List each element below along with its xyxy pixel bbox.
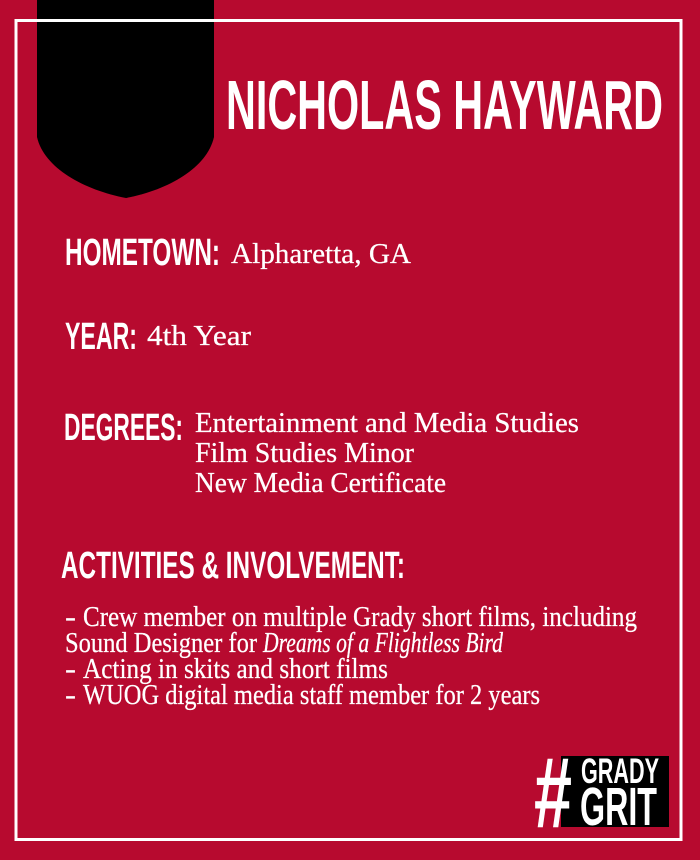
- activities list: Acting in skits and short films: [83, 654, 388, 685]
- activities list: Dreams of a Flightless Bird: [262, 628, 504, 659]
- activities heading: ACTIVITIES & INVOLVEMENT:: [61, 545, 405, 587]
- degrees list: Entertainment and Media Studies: [195, 408, 579, 439]
- activities list: -: [65, 602, 76, 633]
- hometown row: [65, 232, 412, 274]
- year label: YEAR:: [65, 316, 137, 358]
- activities list: Sound Designer for: [65, 628, 258, 659]
- hometown label: HOMETOWN:: [65, 232, 220, 274]
- degrees row: [64, 407, 579, 499]
- year row: [65, 316, 252, 358]
- logo black box: [561, 756, 669, 827]
- activities list: -: [65, 680, 76, 711]
- degrees label: DEGREES:: [64, 407, 183, 449]
- degrees list: Film Studies Minor: [195, 438, 415, 469]
- activities list: -: [65, 654, 76, 685]
- activities list: Crew member on multiple Grady short films, including: [83, 602, 637, 633]
- logo hash: #: [534, 737, 572, 849]
- degrees list: New Media Certificate: [195, 468, 446, 499]
- activities list: [65, 602, 637, 711]
- year value: 4th Year: [147, 321, 252, 352]
- black shield banner: [37, 0, 214, 198]
- Grady Grit logo: [534, 737, 669, 849]
- hometown value: Alpharetta, GA: [231, 239, 412, 270]
- activities list: WUOG digital media staff member for 2 years: [83, 680, 540, 711]
- degrees list: [195, 408, 579, 499]
